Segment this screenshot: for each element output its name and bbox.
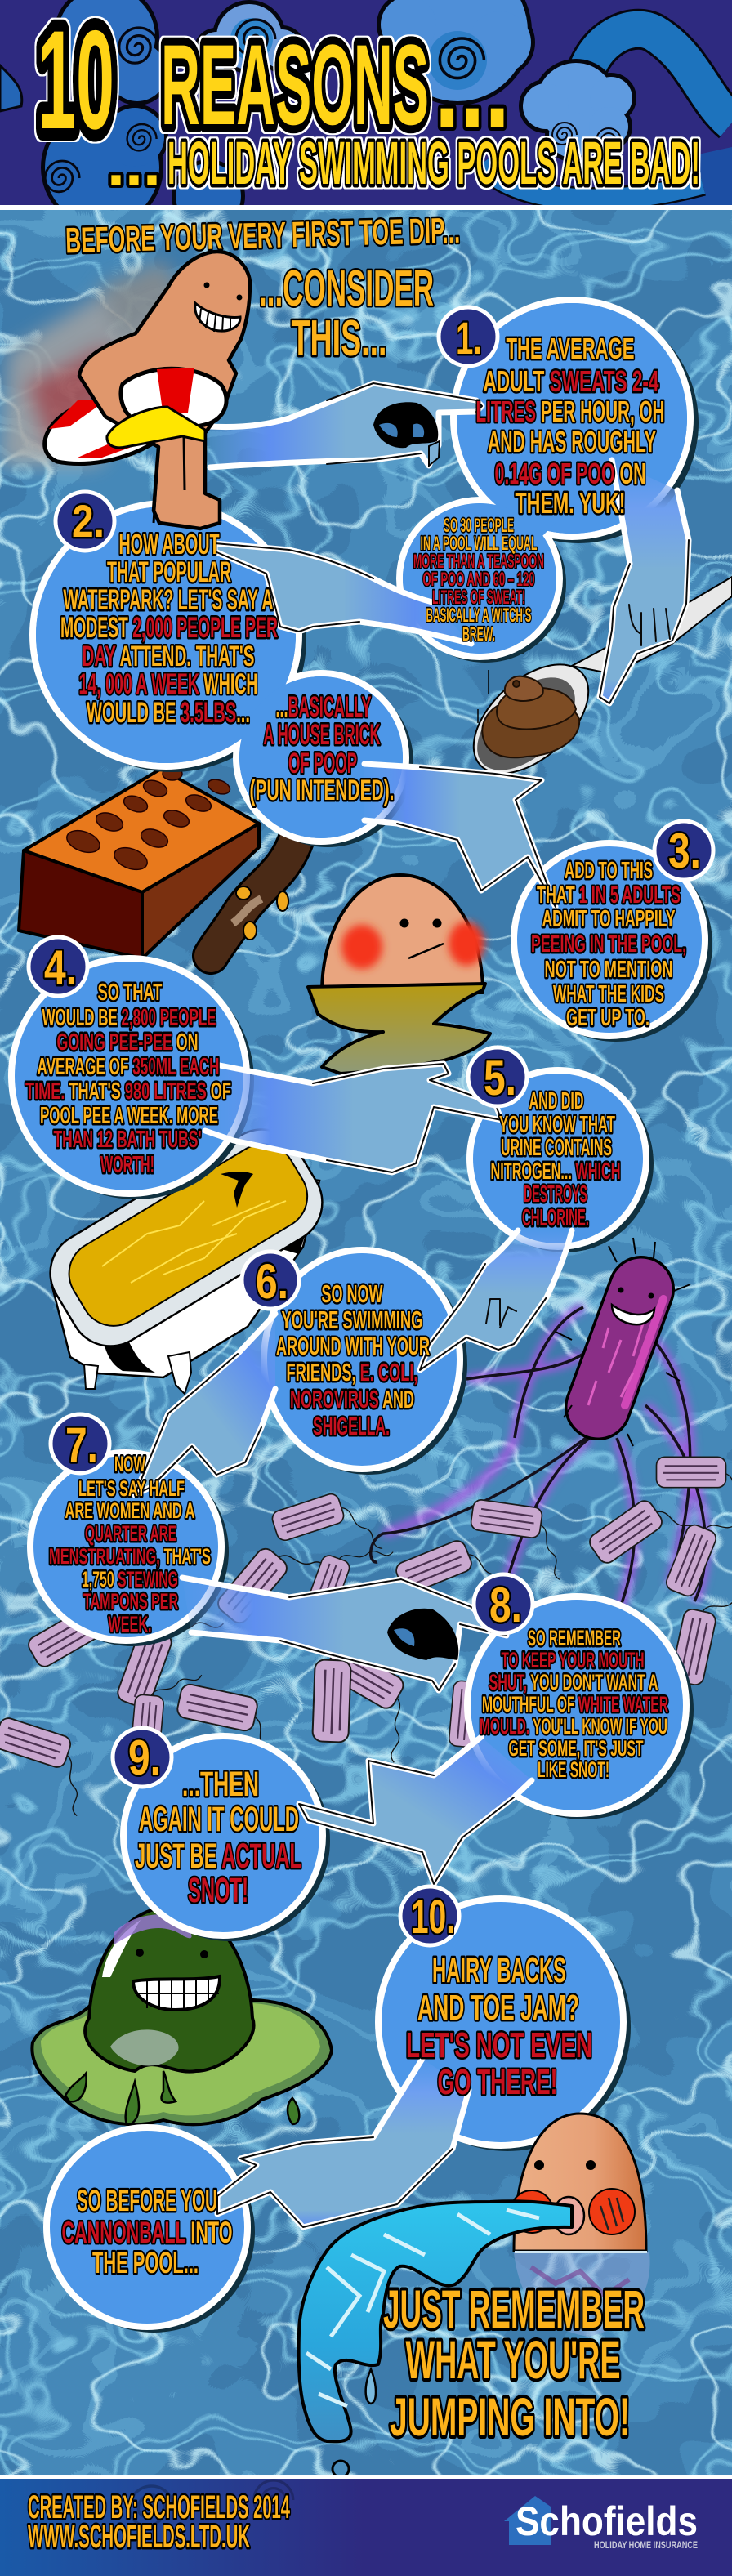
- hand: reason 5 pointing: [420, 1230, 572, 1370]
- icon: floating tampons: [0, 1457, 732, 1816]
- closing bubble text: CANNONBALL INTO: [62, 2216, 232, 2249]
- title: reasons: ...: [435, 16, 510, 153]
- icon: blushing peach blob in urine: [308, 875, 490, 1074]
- icon: final character being sick: [299, 2114, 650, 2477]
- text block 4: AVERAGE OF 350ML EACH: [38, 1054, 219, 1080]
- reason 6 text and badge: [242, 1252, 430, 1440]
- text block 4: TIME. THAT'S 980 LITRES OF: [25, 1078, 231, 1105]
- badge 9: 9.: [128, 1730, 161, 1785]
- text block 9: ...THEN: [182, 1765, 259, 1804]
- text block 7: QUARTER ARE: [85, 1521, 176, 1546]
- finger loop: [373, 402, 438, 448]
- text block 2: DAY ATTEND. THAT'S: [82, 641, 255, 672]
- text block 1 sub-bubble: OF POO AND 60 – 120: [423, 569, 534, 591]
- icon: e. coli bacterium: [371, 1238, 706, 1634]
- text block 10: LET'S NOT EVEN: [406, 2025, 592, 2065]
- character: peach man in rubber ring: [0, 252, 250, 529]
- text block 10: HAIRY BACKS: [432, 1950, 566, 1990]
- text block 1 sub-bubble: IN A POOL WILL EQUAL: [420, 533, 538, 555]
- footer band: [0, 2475, 732, 2576]
- reason 10 text and badge: [400, 1886, 592, 2102]
- text block 5: NITROGEN... WHICH: [490, 1159, 621, 1185]
- badge 4: 4.: [44, 940, 77, 995]
- text block 7: TAMPONS PER: [83, 1589, 178, 1614]
- text block 2: WOULD BE 3.5LBS...: [87, 697, 250, 729]
- text block 6: [276, 1279, 430, 1440]
- hand: reason 1 pointing at spoon: [600, 460, 689, 703]
- icon: brick: [19, 767, 259, 958]
- text block 7: ARE WOMEN AND A: [65, 1498, 194, 1523]
- badge 6: 6.: [256, 1254, 288, 1309]
- text block 2: 14, 000 A WEEK WHICH: [78, 668, 258, 700]
- main title: [38, 2, 700, 199]
- icon: poo stick: [211, 833, 298, 956]
- text block 8: [480, 1626, 668, 1782]
- badge 9: [113, 1728, 172, 1787]
- text block 4: THAN 12 BATH TUBS': [54, 1127, 201, 1153]
- hand: reason 2 pointing: [215, 543, 471, 644]
- badge 3: 3.: [668, 824, 701, 878]
- text block 6: NOROVIRUS AND: [290, 1385, 414, 1413]
- text block 7: 1,750 STEWING: [82, 1567, 178, 1592]
- badge 2: [56, 492, 114, 551]
- bubble backgrounds: [11, 300, 712, 2333]
- text block 7: WEEK.: [108, 1612, 152, 1636]
- icon: spoon with poo: [453, 577, 732, 794]
- text block 5: CHLORINE.: [522, 1205, 589, 1231]
- hand: reason 8 pointing: [299, 1737, 532, 1884]
- reason 3 text and badge: [531, 821, 713, 1031]
- text block 10: AND TOE JAM?: [417, 1988, 579, 2028]
- text block 7: [49, 1452, 211, 1636]
- badge 5: 5.: [484, 1051, 516, 1105]
- bubble 1 with sub-bubble: [399, 300, 699, 663]
- main title: 10: [38, 2, 114, 158]
- hand: reason 6 pointing: [135, 1314, 275, 1495]
- text block 3: [531, 858, 686, 1031]
- logo: Schofields: Schofields: [516, 2498, 698, 2544]
- badge 1: 1.: [456, 312, 482, 364]
- face: [204, 283, 209, 288]
- badge 3: [654, 821, 713, 880]
- hand: reason 4 pointing: [205, 1064, 502, 1172]
- text block 1 sub-bubble: MORE THAN A TEASPOON: [413, 551, 544, 573]
- motion blur: [0, 261, 196, 466]
- text block 2 sub-bubble: OF POOP: [288, 748, 357, 779]
- text block 8: MOUTHFUL OF WHITE WATER: [482, 1692, 668, 1717]
- text block 2: MODEST 2,000 PEOPLE PER: [60, 612, 278, 644]
- text block 1 sub-bubble: BASICALLY A WITCH'S: [426, 605, 531, 627]
- credits: CREATED BY: SCHOFIELDS 2014: [28, 2489, 290, 2525]
- badge 10: 10.: [411, 1891, 455, 1944]
- hand: reason 10 pointing: [217, 2059, 469, 2227]
- text block 7: LET'S SAY HALF: [78, 1476, 185, 1501]
- title: holiday swimming pools are bad: ...: [107, 127, 161, 199]
- intro heading: before your very first toe dip: BEFORE YOUR VERY FIRST TOE DIP...: [65, 211, 461, 261]
- reason 9 text and badge: [113, 1728, 301, 1910]
- text block 5: URINE CONTAINS: [501, 1135, 612, 1161]
- hand: reason 7 pointing: [182, 1578, 507, 1690]
- vomit stream: [299, 2201, 572, 2477]
- text block 1 sub-bubble: BREW.: [462, 623, 495, 645]
- text block 2 sub-bubble: [250, 691, 394, 806]
- bubble 8: [467, 1596, 694, 1819]
- bubble 3: [514, 843, 712, 1042]
- text block 9: [135, 1765, 301, 1910]
- text block 8: LIKE SNOT!: [538, 1757, 609, 1782]
- footer swirl decoration: [129, 2480, 293, 2526]
- text block 1 sub-bubble: [413, 515, 544, 645]
- credits: WWW.SCHOFIELDS.LTD.UK: [28, 2519, 250, 2555]
- text block 1: [475, 332, 665, 520]
- text block 4: [25, 980, 231, 1178]
- text block 7: NOW: [114, 1452, 145, 1476]
- badge 7: [51, 1414, 109, 1473]
- text block 7: MENSTRUATING, THAT'S: [49, 1544, 211, 1569]
- badge 10: [400, 1886, 459, 1945]
- text block 10: [406, 1950, 592, 2102]
- text block 6: AROUND WITH YOUR: [276, 1332, 430, 1360]
- icon: snot monster: [32, 1907, 332, 2124]
- bubble 7: [30, 1453, 229, 1646]
- icon: bathtub of urine: [35, 1114, 337, 1394]
- bubble 6: [264, 1250, 467, 1475]
- badge 2: 2.: [72, 495, 105, 547]
- wave and cloud illustration: [0, 0, 732, 230]
- text block 5: YOU KNOW THAT: [499, 1112, 615, 1138]
- badge 7: 7.: [65, 1417, 98, 1472]
- hand: brick bubble pointing: [364, 764, 556, 907]
- text block 10: GO THERE!: [438, 2062, 557, 2102]
- body: [79, 252, 250, 529]
- text block 1: ADULT SWEATS 2-4: [484, 364, 658, 398]
- text block 5: [490, 1088, 621, 1231]
- reason 5 text and badge: [468, 1047, 621, 1231]
- text block 5: AND DID: [529, 1088, 583, 1114]
- intro heading: consider this: ...CONSIDER: [259, 261, 434, 317]
- closing bubble text: SO BEFORE YOU: [77, 2184, 217, 2217]
- bubble 5: [470, 1070, 654, 1252]
- bubble 4: [11, 958, 254, 1199]
- reason 4 text and badge: [25, 937, 231, 1178]
- tentacles: [371, 1307, 706, 1634]
- badge 1: [439, 307, 498, 366]
- hand: reason 1 pointing: [210, 383, 482, 467]
- title: reasons: [161, 16, 510, 153]
- text block 4: SO THAT: [98, 980, 163, 1006]
- text block 2 sub-bubble: ...BASICALLY: [276, 691, 371, 723]
- text block 6: YOU'RE SWIMMING: [281, 1306, 423, 1334]
- bubble 2 with sub-bubble: [33, 503, 413, 847]
- text block 9: SNOT!: [188, 1871, 248, 1910]
- credits: [28, 2489, 290, 2555]
- reason 7 text and badge: [49, 1414, 211, 1636]
- text block 2 sub-bubble: A HOUSE BRICK: [263, 719, 381, 751]
- text block 1: 0.14G OF POO ON: [495, 457, 645, 490]
- text block 2 sub-bubble: (PUN INTENDED).: [250, 775, 394, 806]
- text block 8: SO REMEMBER: [528, 1626, 621, 1650]
- header banner background: [0, 0, 732, 230]
- text block 4: GOING PEE-PEE ON: [57, 1029, 198, 1056]
- back of rubber ring: [45, 397, 184, 464]
- intro heading: consider this: [259, 261, 434, 367]
- text block 9: AGAIN IT COULD: [139, 1800, 299, 1839]
- text block 9: JUST BE ACTUAL: [135, 1837, 301, 1876]
- text block 6: FRIENDS, E. COLI,: [286, 1358, 418, 1386]
- text block 2: HOW ABOUT: [119, 529, 219, 560]
- badge 8: 8.: [489, 1578, 522, 1632]
- text block 6: SO NOW: [322, 1279, 383, 1308]
- text block 4: WOULD BE 2,800 PEOPLE: [42, 1005, 216, 1031]
- bubble 9: [123, 1736, 330, 1941]
- text block 2: THAT POPULAR: [107, 556, 231, 588]
- badge 4: [29, 937, 87, 996]
- text block 1: THE AVERAGE: [507, 332, 634, 365]
- text block 3: GET UP TO.: [566, 1005, 649, 1031]
- text block 2: WATERPARK? LET'S SAY A: [64, 584, 273, 616]
- closing bubble text: THE POOL...: [92, 2246, 199, 2279]
- text block 3: ADD TO THIS: [565, 858, 653, 884]
- intro heading: consider this: THIS...: [291, 310, 387, 367]
- title: reasons: REASONS: [161, 20, 429, 149]
- text block 5: DESTROYS: [524, 1181, 587, 1208]
- front of rubber ring: [121, 368, 226, 429]
- poo coil: [482, 676, 579, 757]
- text block 2: [60, 529, 278, 729]
- swimming trunks: [107, 407, 205, 448]
- reason 1 text and badge: [413, 307, 665, 645]
- text block 1 sub-bubble: LITRES OF SWEAT!: [432, 587, 525, 609]
- closing message: just remember what you're jumping into: [383, 2279, 645, 2447]
- badge 5: [468, 1047, 527, 1106]
- text block 4: POOL PEE A WEEK. MORE: [40, 1103, 218, 1129]
- closing bubble: [47, 2127, 255, 2333]
- reason 2 text and badge: [56, 492, 394, 806]
- logo: Schofields: HOLIDAY HOME INSURANCE: [594, 2539, 698, 2551]
- text block 1 sub-bubble: SO 30 PEOPLE: [444, 515, 514, 537]
- badge 6: [242, 1252, 299, 1309]
- text block 1: THEM. YUK!: [515, 486, 626, 520]
- text block 6: SHIGELLA.: [313, 1412, 390, 1440]
- closing bubble text: [62, 2184, 232, 2279]
- reason 8 text and badge: [474, 1574, 668, 1782]
- badge 8: [474, 1574, 533, 1633]
- text block 4: WORTH!: [100, 1152, 154, 1178]
- bubble 10: [378, 1899, 631, 2151]
